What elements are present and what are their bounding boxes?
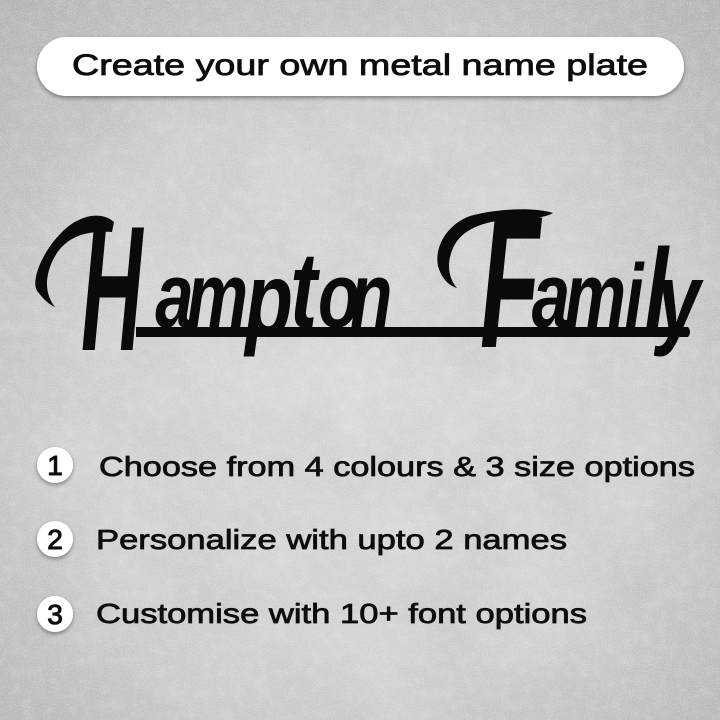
number badge 1: 1 [47, 450, 63, 481]
word: Hampton: H [81, 190, 144, 388]
step 3 text: Customise with 10+ font options [96, 598, 587, 629]
number badge 3 [37, 596, 73, 632]
step 1 [37, 447, 695, 483]
word: Family: y [654, 242, 704, 358]
word: Hampton: a [155, 244, 194, 347]
step 1 text: Choose from 4 colours & 3 size options [99, 451, 695, 482]
number badge 3: 3 [47, 599, 63, 630]
swash of the F [437, 209, 553, 288]
word: Hampton: n [350, 244, 392, 347]
number badge 2 [37, 521, 73, 557]
word: Family: a [532, 244, 570, 347]
heading pill [37, 37, 684, 96]
word: Family: F [480, 178, 543, 388]
word: Hampton: o [318, 244, 360, 347]
heading text: Create your own metal name plate [72, 49, 648, 82]
plate base bar [136, 327, 690, 337]
step 2 text: Personalize with upto 2 names [96, 524, 567, 555]
step 2 [37, 521, 567, 557]
swash of the H [35, 216, 114, 307]
metal name plate: Hampton Family [35, 178, 704, 388]
word: Hampton: m [187, 244, 248, 347]
word: Hampton: t [290, 231, 321, 351]
number badge 1 [37, 447, 73, 483]
word: Family: m [565, 244, 626, 347]
step 3 [37, 596, 587, 632]
word: Hampton: p [243, 242, 293, 358]
word: Family: i [625, 246, 645, 346]
word: Family: l [645, 225, 670, 351]
number badge 2: 2 [47, 524, 63, 555]
